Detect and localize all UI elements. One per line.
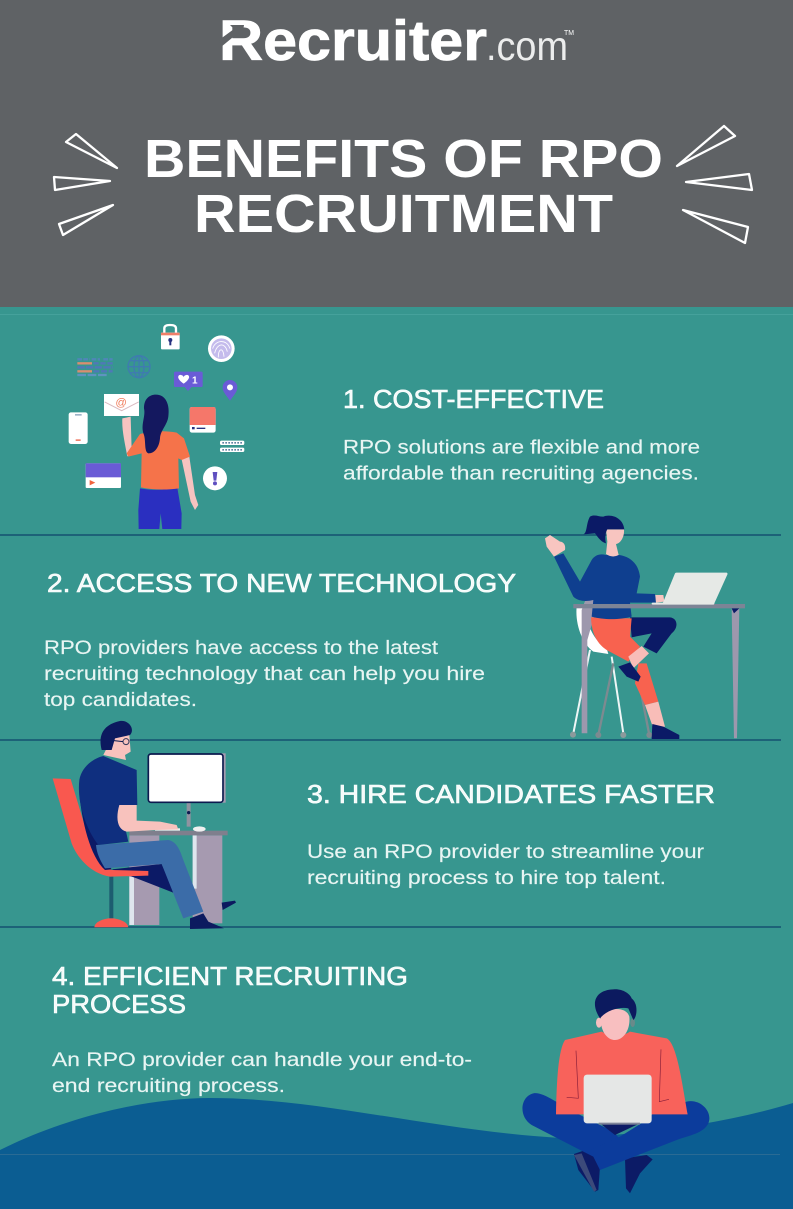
icon: email envelope: @ bbox=[115, 397, 127, 409]
text: 1 body bbox=[343, 436, 700, 484]
logo: .com bbox=[486, 23, 568, 69]
illustration: man cross-legged with laptop bbox=[522, 989, 709, 1193]
icon: alert bbox=[203, 466, 227, 490]
heading: 4 efficient recruiting process bbox=[52, 961, 408, 1019]
icon: email envelope bbox=[104, 394, 139, 416]
icon: right burst triangles bbox=[677, 126, 752, 243]
text: 1 body: affordable than recruiting agencies. bbox=[343, 462, 699, 484]
text: 2 body: RPO providers have access to the latest bbox=[44, 637, 439, 659]
text: 3 body: Use an RPO provider to streamline your bbox=[307, 841, 705, 863]
chair bbox=[570, 587, 652, 738]
heading: 3 hire candidates faster: 3. HIRE CANDIDATES FASTER bbox=[307, 779, 715, 809]
icon: lock bbox=[161, 325, 180, 349]
computer monitor bbox=[148, 753, 226, 832]
legs bbox=[522, 1093, 709, 1170]
text: 4 body bbox=[52, 1049, 472, 1097]
text: 3 body: recruiting process to hire top talent. bbox=[307, 867, 666, 889]
wave bbox=[0, 1098, 793, 1209]
logo: Recruiter bbox=[219, 9, 487, 73]
laptop bbox=[652, 573, 728, 605]
icon: video card bbox=[86, 463, 121, 488]
text: 1 body: RPO solutions are flexible and more bbox=[343, 436, 700, 458]
icon: like bubble: 1 bbox=[192, 375, 198, 386]
person bbox=[545, 515, 679, 739]
desk bbox=[573, 604, 745, 738]
head bbox=[595, 989, 636, 1040]
icon: password fields bbox=[220, 441, 244, 452]
teal background bbox=[0, 307, 793, 1209]
back leg bbox=[112, 864, 175, 893]
heading: 4 efficient recruiting process: 4. EFFICIENT RECRUITING bbox=[52, 961, 408, 991]
chair bbox=[53, 778, 148, 927]
text: 2 body: recruiting technology that can help you hire bbox=[44, 663, 485, 685]
text: 3 body bbox=[307, 841, 705, 889]
panel: 1 cost-effective illustration bbox=[69, 325, 244, 529]
title bbox=[144, 129, 663, 244]
text: 2 body bbox=[44, 637, 485, 711]
laptop bbox=[584, 1075, 652, 1125]
heading: 1 cost-effective: 1. COST-EFFECTIVE bbox=[343, 384, 604, 414]
illustration: man at computer bbox=[53, 721, 236, 929]
icon: like bubble bbox=[174, 372, 203, 391]
icon: globe bbox=[128, 356, 150, 378]
logo: TM bbox=[564, 30, 574, 37]
icon: fingerprint bbox=[208, 335, 235, 362]
title: BENEFITS OF RPO bbox=[144, 129, 663, 189]
sweater bbox=[556, 1032, 688, 1114]
heading: 2 access to new technology: 2. ACCESS TO NEW TECHNOLOGY bbox=[47, 568, 516, 598]
heading: 4 efficient recruiting process: PROCESS bbox=[52, 989, 186, 1019]
feet bbox=[574, 1147, 653, 1193]
title: RECRUITMENT bbox=[194, 184, 613, 244]
illustration: woman at desk with laptop bbox=[545, 515, 745, 739]
woman from behind bbox=[122, 395, 198, 529]
text: 4 body: end recruiting process. bbox=[52, 1075, 285, 1097]
desk bbox=[129, 831, 228, 925]
icon: app card bbox=[190, 407, 216, 433]
text: 4 body: An RPO provider can handle your end-to- bbox=[52, 1049, 472, 1071]
person bbox=[79, 721, 236, 929]
icon: map pin bbox=[223, 380, 237, 401]
text: 2 body: top candidates. bbox=[44, 689, 197, 711]
icon: phone bbox=[69, 412, 88, 444]
icon: data grid bbox=[77, 359, 113, 375]
header band bbox=[0, 0, 793, 307]
icon: left burst triangles bbox=[54, 134, 117, 235]
